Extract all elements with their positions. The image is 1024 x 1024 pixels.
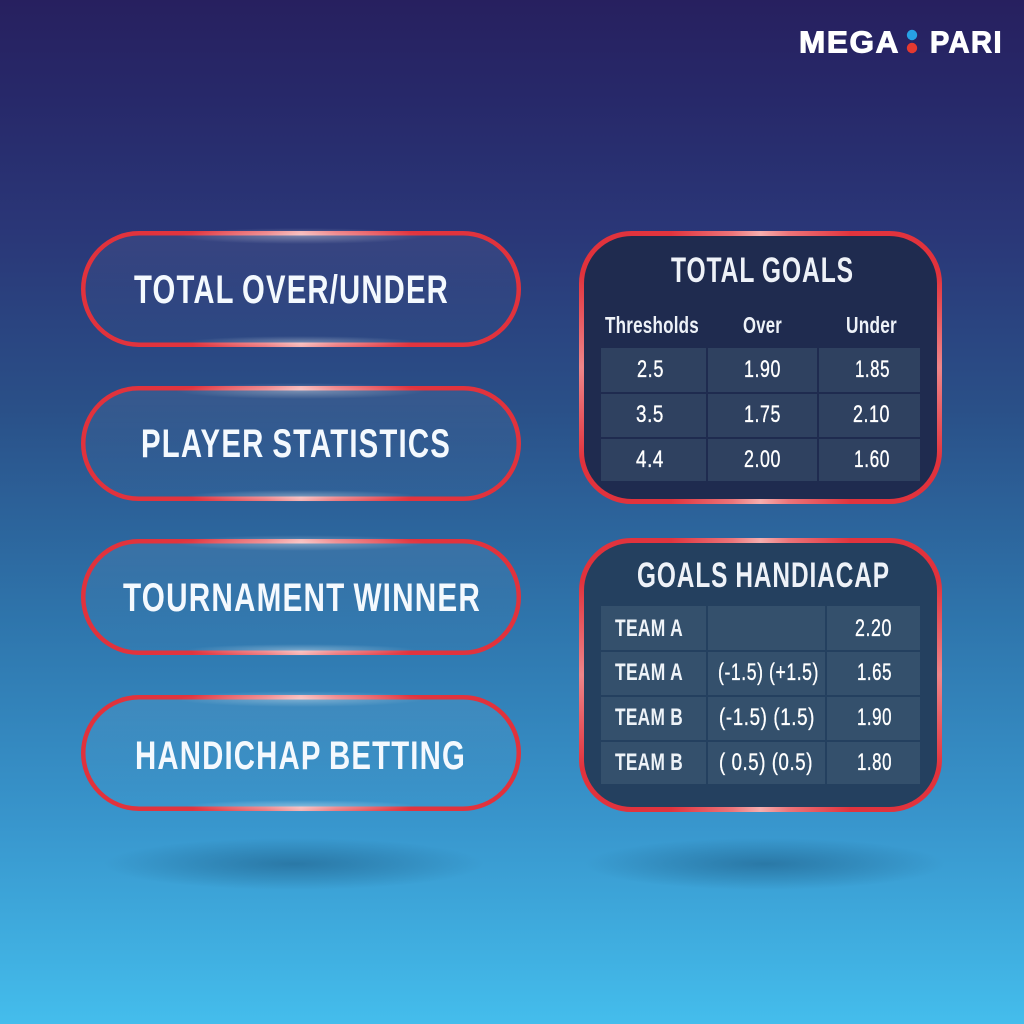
table: Goals Handicap odds: (-1.5) (1.5) (719, 704, 815, 731)
table: Goals Handicap odds: ( 0.5) (0.5) (719, 749, 813, 776)
panel: Total Goals (582, 234, 940, 502)
heading: Total Goals: TOTAL GOALS (671, 251, 854, 290)
table: Total Goals odds: 1.90 (744, 356, 781, 383)
table: Goals Handicap odds: TEAM B (615, 704, 683, 731)
table: Total Goals odds: 1.85 (855, 356, 890, 383)
table: Total Goals odds: 4.4 (636, 446, 664, 473)
table: Total Goals odds: Under (846, 312, 897, 338)
table: Total Goals odds: 2.5 (637, 356, 664, 383)
pill: Total Over/Under: TOTAL OVER/UNDER (134, 268, 449, 312)
heading: Goals Handiacap: GOALS HANDIACAP (637, 556, 890, 595)
logo: Megapari: PARI (930, 24, 1003, 60)
table: Total Goals odds: 2.10 (853, 401, 890, 428)
logo: Megapari (799, 24, 1003, 60)
shadow under left column (104, 838, 484, 890)
table: Total Goals odds: 2.00 (744, 446, 781, 473)
pill: Total Over/Under (83, 228, 519, 348)
table: Total Goals odds: 1.60 (854, 446, 890, 473)
table: Total Goals odds (601, 312, 920, 481)
table: Total Goals odds: Thresholds (605, 312, 699, 338)
pill: Player Statistics: PLAYER STATISTICS (141, 422, 451, 466)
table: Goals Handicap odds: TEAM A (615, 659, 683, 686)
table: Goals Handicap odds: TEAM B (615, 749, 683, 776)
table: Total Goals odds: Over (743, 312, 782, 338)
table: Goals Handicap odds: 1.65 (857, 659, 892, 686)
pill: Tournament Winner: TOURNAMENT WINNER (123, 576, 481, 620)
table: Goals Handicap odds: TEAM A (615, 615, 683, 642)
table: Goals Handicap odds: 2.20 (855, 615, 892, 642)
pill: Handichap Betting (83, 691, 519, 812)
table: Goals Handicap odds: 1.80 (857, 749, 892, 776)
logo: Megapari: MEGA (799, 24, 900, 60)
table: Total Goals odds: 3.5 (636, 401, 664, 428)
table: Total Goals odds: 1.75 (744, 401, 781, 428)
table: Goals Handicap odds (601, 606, 920, 784)
shadow under right column (585, 838, 945, 890)
pill: Tournament Winner (83, 535, 519, 656)
pill: Player Statistics (83, 383, 519, 502)
panel: Goals Handicap (582, 540, 940, 810)
table: Goals Handicap odds: (-1.5) (+1.5) (718, 659, 819, 686)
table: Goals Handicap odds: 1.90 (857, 704, 892, 731)
pill: Handichap Betting: HANDICHAP BETTING (135, 734, 466, 778)
